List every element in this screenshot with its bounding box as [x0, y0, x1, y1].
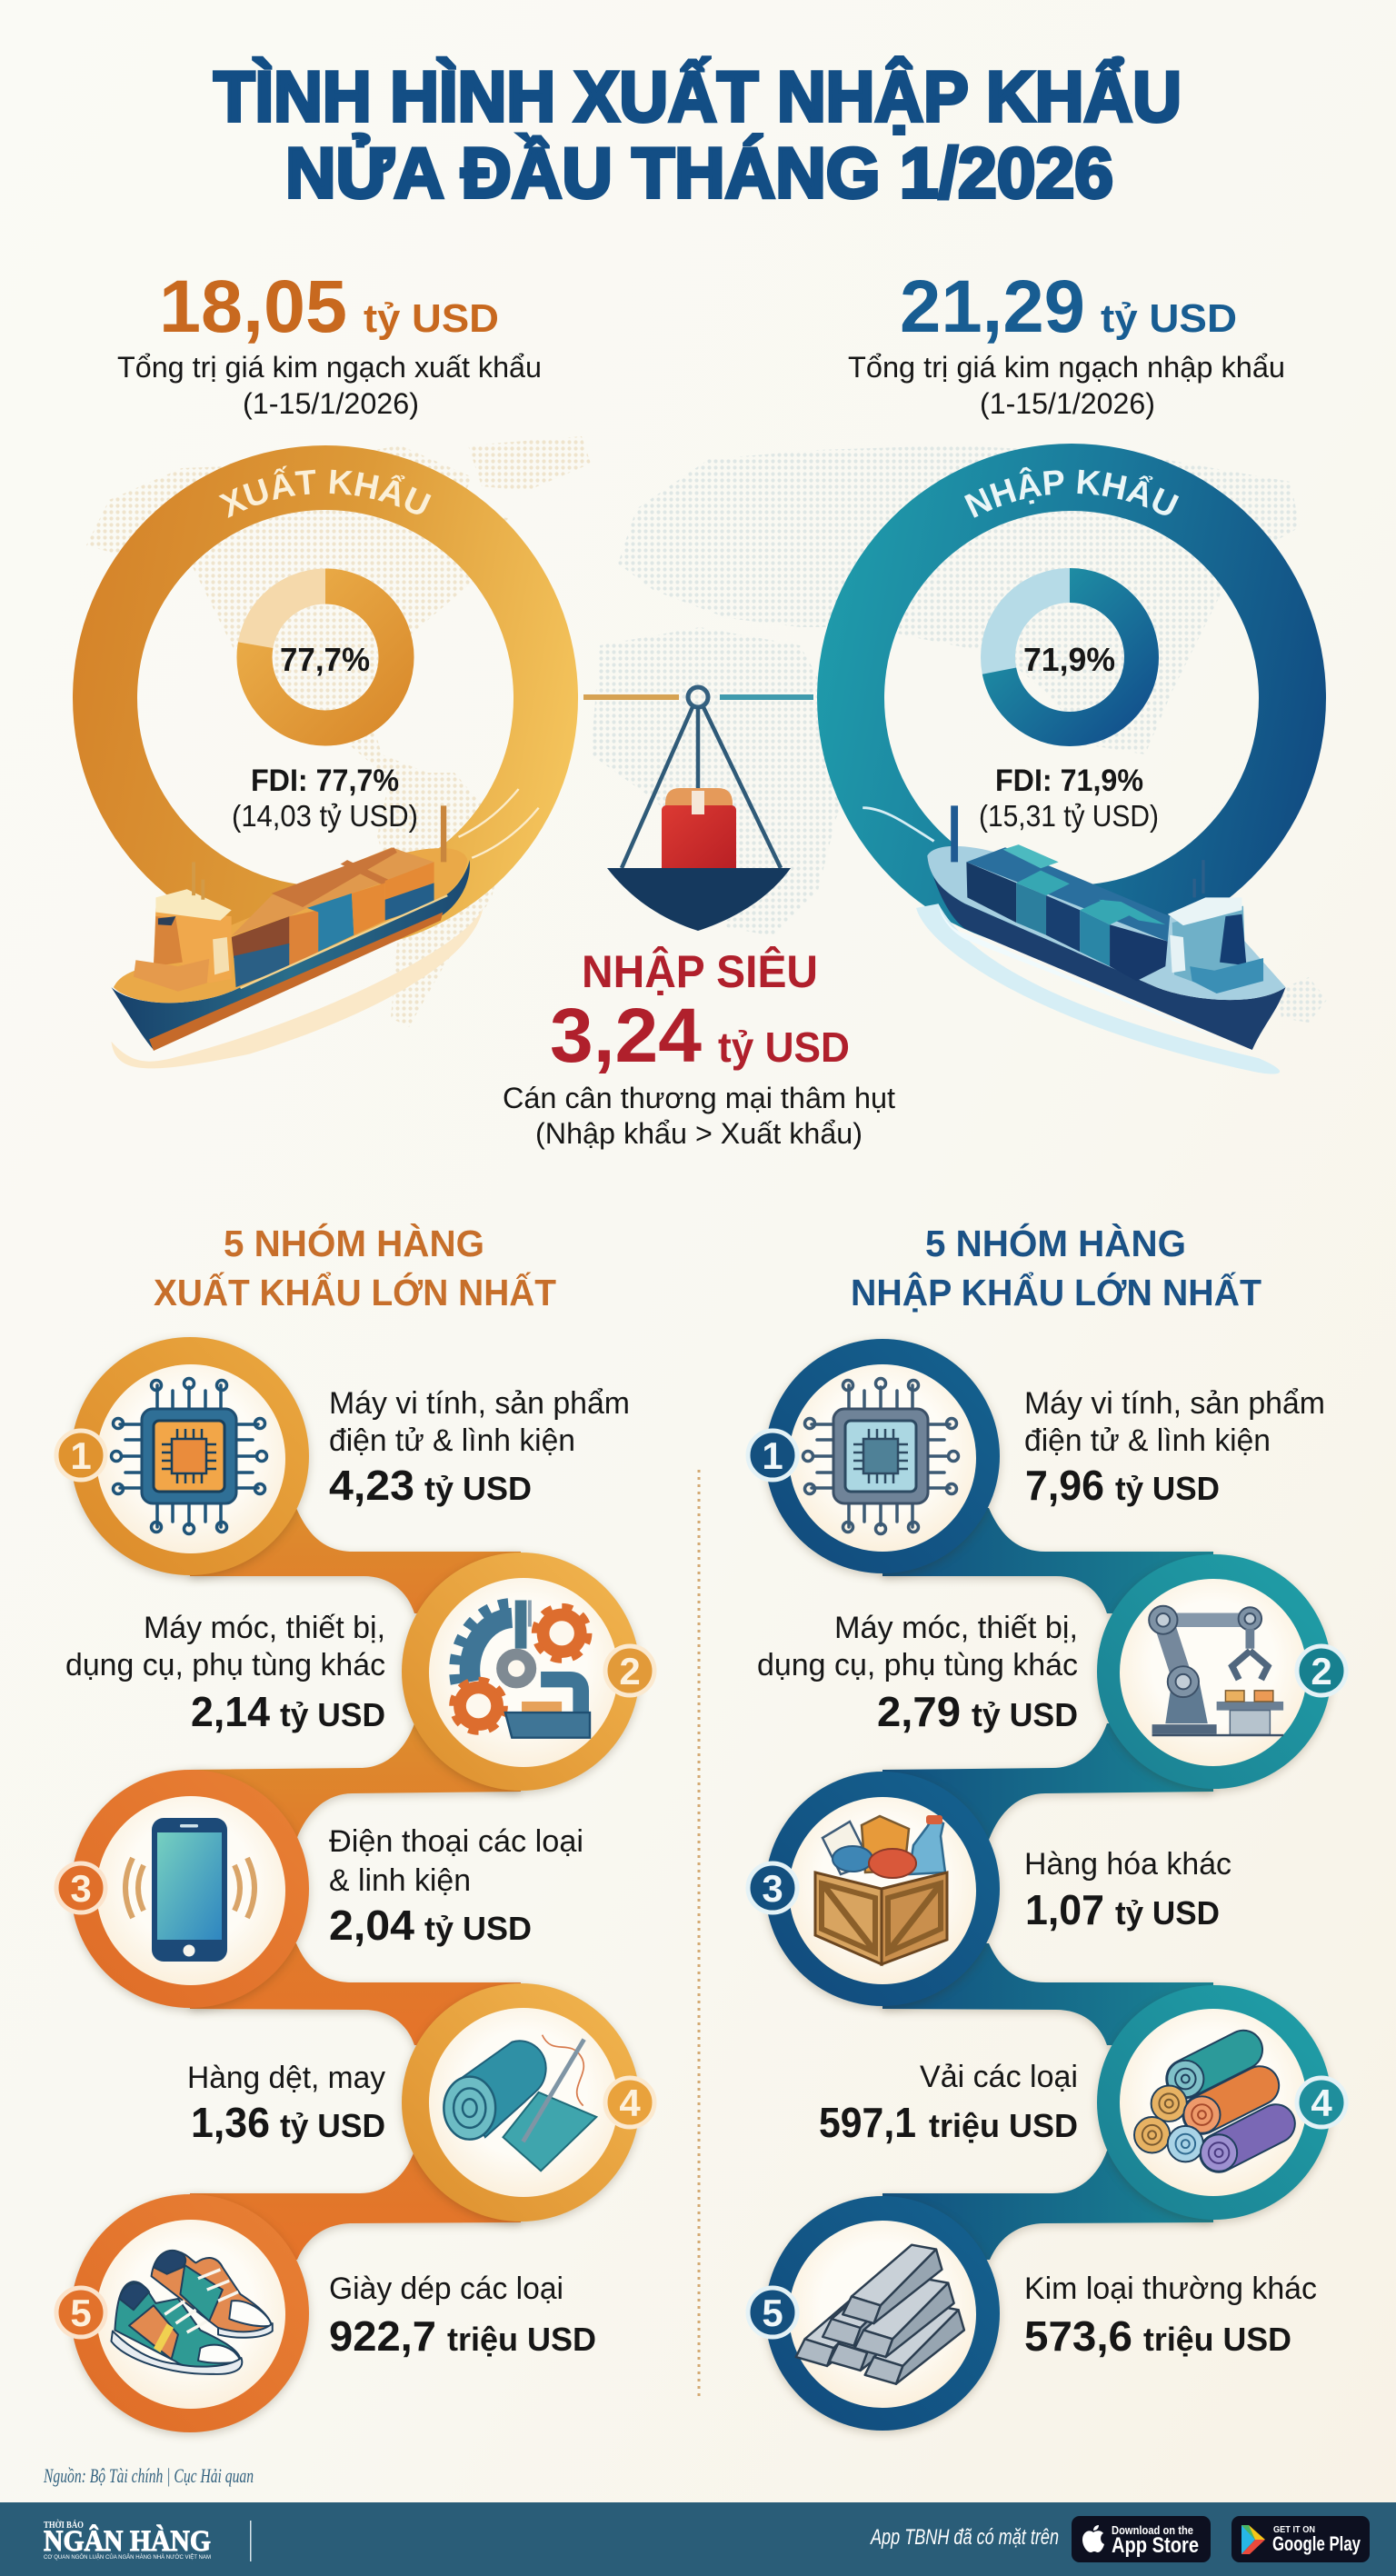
export step 2	[65, 1553, 654, 1791]
import step 1: 7,96	[1025, 1462, 1104, 1509]
import step 2: 2	[1311, 1650, 1332, 1692]
import FDI donut	[998, 585, 1142, 729]
import step 5: Kim loại thường khác	[1024, 2271, 1317, 2306]
import FDI text	[979, 764, 1159, 833]
export step 4: tỷ USD	[280, 2107, 385, 2144]
title	[214, 56, 1182, 213]
newspaper logo: NGÂN HÀNG	[44, 2523, 211, 2558]
trade balance scale icon	[607, 687, 791, 931]
export ring: XUẤT KHẨU	[218, 465, 431, 518]
import total	[848, 265, 1285, 420]
App Store button: Download on the	[1112, 2524, 1193, 2537]
icon: microchip	[803, 1378, 958, 1534]
export step 4	[187, 1983, 654, 2222]
export step 2: 2,14	[191, 1688, 270, 1735]
import ribbons	[882, 1508, 1213, 2260]
icon: fabric rolls	[1134, 2050, 1276, 2172]
import step 2	[757, 1554, 1346, 1789]
newspaper logo: THỜI BÁO	[44, 2520, 84, 2531]
trade deficit callout: 3,24	[550, 993, 702, 1078]
icon: metal ingots	[796, 2245, 964, 2384]
heading: top import groups: 5 NHÓM HÀNG	[925, 1223, 1186, 1264]
connector lines of the balance	[583, 694, 813, 700]
export step 2: tỷ USD	[280, 1696, 385, 1733]
export step 5	[56, 2194, 596, 2432]
export step 5: Giày dép các loại	[329, 2271, 563, 2306]
heading: top export groups: XUẤT KHẨU LỚN NHẤT	[154, 1271, 556, 1313]
import step 4: Vải các loại	[920, 2060, 1078, 2094]
import step 2: dụng cụ, phụ tùng khác	[757, 1648, 1078, 1682]
export step 4: Hàng dệt, may	[187, 2061, 385, 2095]
App Store button	[1072, 2516, 1211, 2562]
import total: Tổng trị giá kim ngạch nhập khẩu	[848, 351, 1285, 384]
icon: sneakers	[111, 2251, 273, 2374]
import step 3: 1,07	[1025, 1886, 1104, 1933]
import ring: NHẬP KHẨU	[964, 467, 1180, 518]
panel: export groups chain	[56, 1337, 654, 2432]
import FDI donut: 71,9%	[1023, 641, 1115, 678]
import total: 21,29	[900, 265, 1085, 348]
export ribbons	[190, 1508, 521, 2260]
title: NỬA ĐẦU THÁNG 1/2026	[285, 133, 1113, 213]
export step 2: 2	[619, 1650, 641, 1692]
export step 1: Máy vi tính, sản phẩm	[329, 1386, 630, 1421]
App Store button: App Store	[1112, 2533, 1199, 2558]
export FDI text: FDI: 77,7%	[251, 764, 399, 798]
icon: crate of goods	[815, 1815, 947, 1964]
Google Play button	[1231, 2516, 1370, 2562]
import step 3	[748, 1772, 1231, 2006]
import step 4: 4	[1311, 2082, 1332, 2124]
source note: Nguồn: Bộ Tài chính | Cục Hải quan	[43, 2464, 254, 2487]
export FDI text: (14,03 tỷ USD)	[232, 799, 418, 833]
import step 3: Hàng hóa khác	[1024, 1847, 1231, 1882]
Google Play button: Google Play	[1272, 2532, 1361, 2555]
icon: gears and machine	[453, 1600, 590, 1738]
import step 3: tỷ USD	[1115, 1894, 1220, 1932]
import FDI text: (15,31 tỷ USD)	[979, 799, 1159, 833]
export step 2: dụng cụ, phụ tùng khác	[65, 1648, 385, 1682]
import step 5: triệu USD	[1143, 2321, 1291, 2358]
import total: (1-15/1/2026)	[980, 387, 1155, 420]
newspaper logo: CƠ QUAN NGÔN LUẬN CỦA NGÂN HÀNG NHÀ NƯỚC VIỆT NAM	[44, 2553, 211, 2561]
export FDI donut	[254, 586, 396, 728]
export step 4: 4	[619, 2082, 641, 2124]
import step 5	[748, 2196, 1317, 2431]
icon: fabric roll and needle	[444, 2035, 596, 2171]
import step 2: Máy móc, thiết bị,	[834, 1611, 1078, 1645]
trade deficit callout: NHẬP SIÊU	[582, 946, 818, 997]
import step 1: điện tử & lình kiện	[1024, 1423, 1271, 1458]
export step 5: 922,7	[329, 2312, 436, 2360]
Google Play button: GET IT ON	[1273, 2524, 1315, 2535]
import step 1: Máy vi tính, sản phẩm	[1024, 1386, 1325, 1421]
heading: top import groups	[851, 1223, 1261, 1313]
heading: top export groups: 5 NHÓM HÀNG	[224, 1223, 484, 1264]
export step 3: tỷ USD	[424, 1910, 532, 1947]
import step 1	[748, 1339, 1325, 1573]
export step 3: & linh kiện	[329, 1863, 471, 1898]
import ring	[817, 444, 1326, 953]
import step 4	[819, 1985, 1346, 2220]
import step 5: 573,6	[1024, 2312, 1132, 2360]
export FDI donut: 77,7%	[280, 641, 370, 678]
import step 5: 5	[762, 2291, 783, 2334]
import step 4: 597,1	[819, 2099, 916, 2146]
export step 3: Điện thoại các loại	[329, 1824, 583, 1859]
icon: smartphone	[125, 1818, 254, 1962]
footer bar	[0, 2502, 1396, 2576]
export total: 18,05	[159, 265, 347, 348]
trade deficit callout	[503, 946, 895, 1150]
import step 3: 3	[762, 1867, 783, 1910]
import step 4: triệu USD	[929, 2107, 1078, 2144]
export step 2: Máy móc, thiết bị,	[144, 1611, 385, 1645]
import step 2: tỷ USD	[972, 1696, 1078, 1733]
import step 2: 2,79	[877, 1688, 961, 1735]
export step 5: triệu USD	[447, 2321, 596, 2358]
export step 1: 4,23	[329, 1462, 414, 1509]
heading: top import groups: NHẬP KHẨU LỚN NHẤT	[851, 1271, 1261, 1313]
export step 1	[56, 1337, 630, 1575]
export step 3	[56, 1770, 583, 2008]
icon: robot arm	[1149, 1606, 1283, 1736]
title: TÌNH HÌNH XUẤT NHẬP KHẨU	[214, 56, 1182, 136]
export cargo ship	[111, 789, 539, 1068]
export step 3: 3	[70, 1867, 92, 1910]
import cargo ship	[863, 805, 1286, 1074]
heading: top export groups	[154, 1223, 556, 1313]
icon: microchip	[111, 1378, 267, 1534]
export ring	[73, 445, 578, 942]
export total	[117, 265, 542, 420]
export FDI text	[232, 764, 418, 833]
app availability text: App TBNH đã có mặt trên	[869, 2525, 1059, 2550]
export step 4: 1,36	[191, 2099, 270, 2146]
export step 1: tỷ USD	[424, 1470, 532, 1507]
trade deficit callout: Cán cân thương mại thâm hụt	[503, 1082, 895, 1114]
import step 1: 1	[762, 1434, 783, 1477]
export total: tỷ USD	[364, 296, 499, 341]
export total: (1-15/1/2026)	[243, 387, 419, 420]
export step 3: 2,04	[329, 1902, 414, 1949]
export step 1: 1	[70, 1434, 92, 1477]
trade deficit callout: tỷ USD	[718, 1023, 850, 1071]
export step 5: 5	[70, 2291, 92, 2334]
import step 1: tỷ USD	[1115, 1470, 1220, 1507]
dotted world map background	[86, 436, 1327, 1027]
import total: tỷ USD	[1101, 296, 1237, 341]
export step 1: điện tử & lình kiện	[329, 1423, 575, 1458]
panel: import groups chain	[748, 1339, 1346, 2431]
trade deficit callout: (Nhập khẩu > Xuất khẩu)	[535, 1117, 863, 1150]
import FDI text: FDI: 71,9%	[995, 764, 1143, 798]
export total: Tổng trị giá kim ngạch xuất khẩu	[117, 351, 542, 384]
